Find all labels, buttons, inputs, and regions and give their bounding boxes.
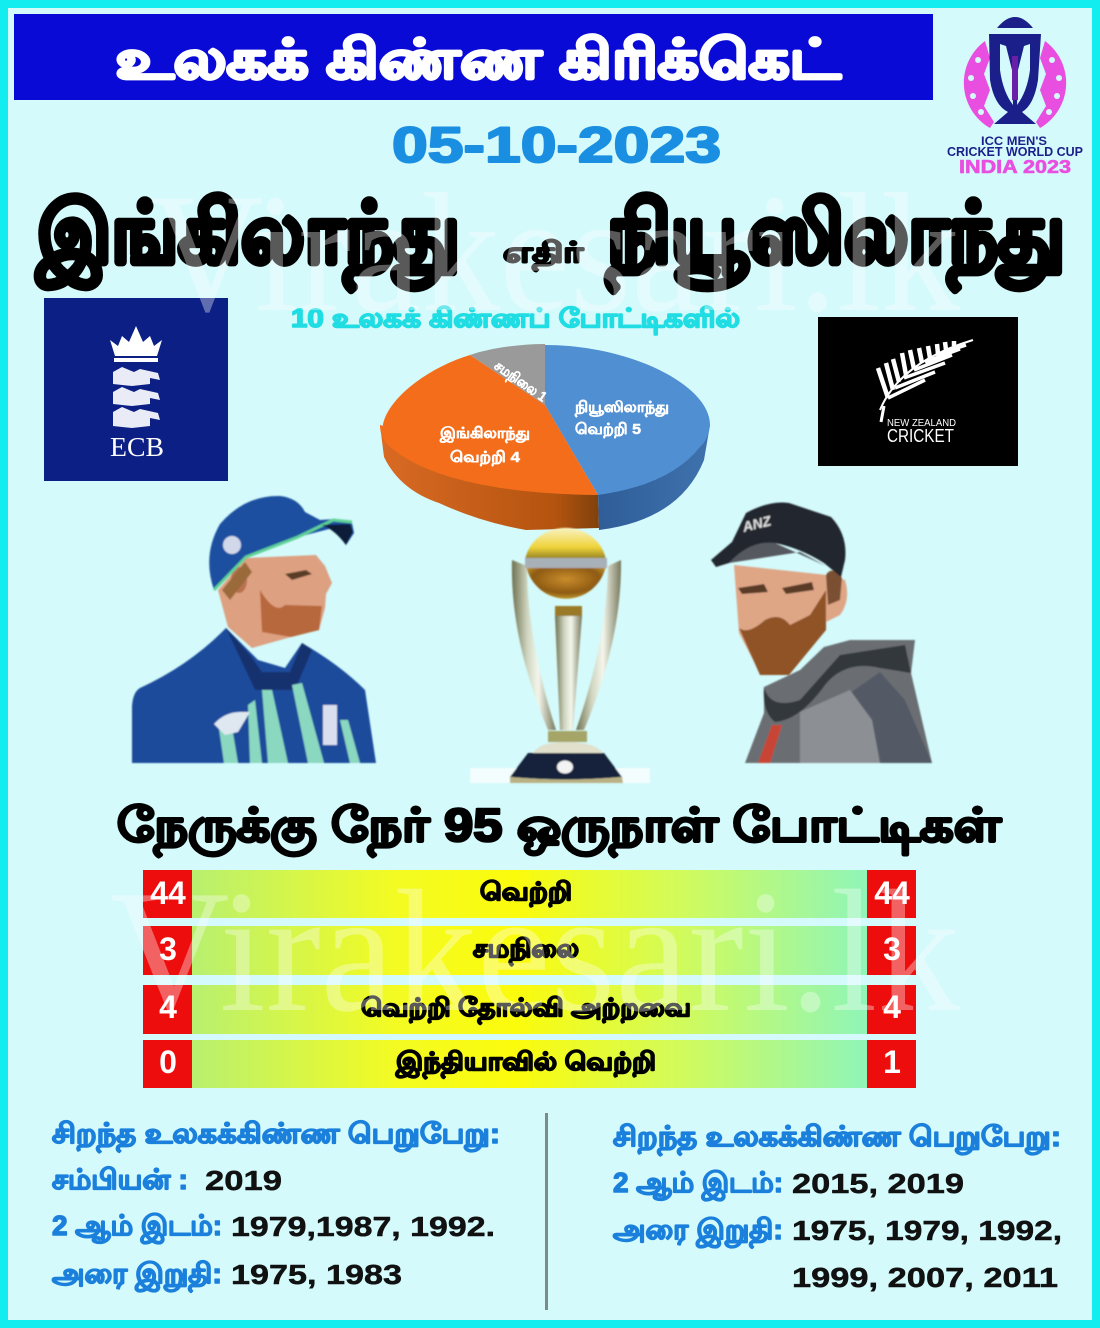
row: wins: 44: [874, 875, 910, 911]
panel: England achievements: அரை இறுதி:: [52, 1258, 222, 1293]
date: 05-10-2023: [392, 117, 721, 173]
panel: England achievements: 2019: [205, 1165, 282, 1196]
panel: New Zealand achievements: 1975, 1979, 1992,: [792, 1215, 1062, 1246]
row: wins in India: 1: [883, 1044, 901, 1080]
panel: New Zealand achievements: 2015, 2019: [792, 1168, 964, 1199]
panel: England achievements: 1979,1987, 1992.: [231, 1211, 495, 1242]
panel: England achievements: [52, 1118, 500, 1293]
watermark: [110, 159, 960, 1048]
icon: ICC world cup logo: INDIA 2023: [959, 157, 1071, 177]
row: wins in India: [143, 1040, 916, 1088]
watermark: Virakesari.lk: [150, 159, 960, 347]
heading: teams: நியூஸிலாந்து: [606, 186, 1065, 293]
panel: England achievements: 1975, 1983: [231, 1259, 402, 1290]
pie label: New Zealand: [574, 399, 669, 438]
pie label: New Zealand: நியூஸிலாந்து: [574, 399, 669, 417]
pie label: England: இங்கிலாந்து: [439, 425, 530, 443]
heading: head to head: நேருக்கு நேர் 95 ஒருநாள் போட்டிகள்: [117, 799, 1002, 857]
row: ties: 3: [883, 931, 901, 967]
icon: ECB logo: ECB: [110, 432, 164, 462]
row: no result: வெற்றி தோல்வி அற்றவை: [361, 994, 691, 1025]
panel: New Zealand achievements: சிறந்த உலகக்கிண்ண பெறுபேறு:: [613, 1121, 1061, 1156]
pie label: New Zealand: வெற்றி 5: [575, 421, 641, 438]
panel: England achievements: சிறந்த உலகக்கிண்ண பெறுபேறு:: [52, 1118, 500, 1153]
pie label: draw: சமநிலை 1: [491, 357, 550, 406]
icon: ECB logo: [44, 298, 228, 481]
pie chart: world cup results: [380, 344, 710, 530]
photo: New Zealand captain: [711, 502, 932, 763]
pie label: England: வெற்றி 4: [450, 449, 521, 466]
heading: teams: எதிர்: [503, 237, 583, 272]
pie label: England: [439, 425, 530, 466]
row: wins in India: 0: [159, 1044, 177, 1080]
heading: teams: இங்கிலாந்து: [36, 186, 460, 292]
row: ties: [143, 926, 916, 975]
comparison table: [143, 870, 916, 1088]
row: no result: 4: [159, 989, 177, 1025]
photo: England captain: [132, 496, 376, 763]
row: wins in India: இந்தியாவில் வெற்றி: [395, 1048, 656, 1079]
heading: teams: [36, 186, 1065, 293]
icon: ICC world cup logo: [947, 17, 1083, 177]
watermark: Virakesari.lk: [110, 854, 960, 1048]
row: wins: வெற்றி: [480, 878, 572, 907]
panel: New Zealand achievements: [613, 1121, 1062, 1293]
row: no result: [143, 985, 916, 1034]
panel: England achievements: சம்பியன் :: [52, 1164, 188, 1195]
icon: ICC world cup logo: CRICKET WORLD CUP: [947, 145, 1083, 159]
panel: New Zealand achievements: 1999, 2007, 2011: [792, 1262, 1058, 1293]
icon: New Zealand Cricket logo: CRICKET: [887, 426, 954, 446]
photo: New Zealand captain: ANZ: [740, 512, 773, 535]
panel: New Zealand achievements: 2 ஆம் இடம்:: [613, 1167, 783, 1201]
icon: New Zealand Cricket logo: [818, 317, 1018, 466]
panel: New Zealand achievements: அரை இறுதி:: [613, 1214, 783, 1249]
subheading: world cup record: 10 உலகக் கிண்ணப் போட்டிகளில்: [291, 303, 740, 336]
icon: New Zealand Cricket logo: NEW ZEALAND: [887, 417, 956, 429]
row: ties: 3: [159, 931, 177, 967]
title banner: உலகக் கிண்ண கிரிக்கெட்: [116, 30, 842, 90]
row: wins: 44: [150, 875, 186, 911]
panel: England achievements: 2 ஆம் இடம்:: [52, 1210, 222, 1244]
icon: ICC world cup logo: ICC MEN'S: [981, 134, 1047, 148]
row: wins: [143, 870, 916, 918]
title banner: [14, 14, 933, 100]
icon: trophy: [470, 528, 650, 783]
row: ties: சமநிலை: [473, 935, 579, 966]
row: no result: 4: [883, 989, 901, 1025]
